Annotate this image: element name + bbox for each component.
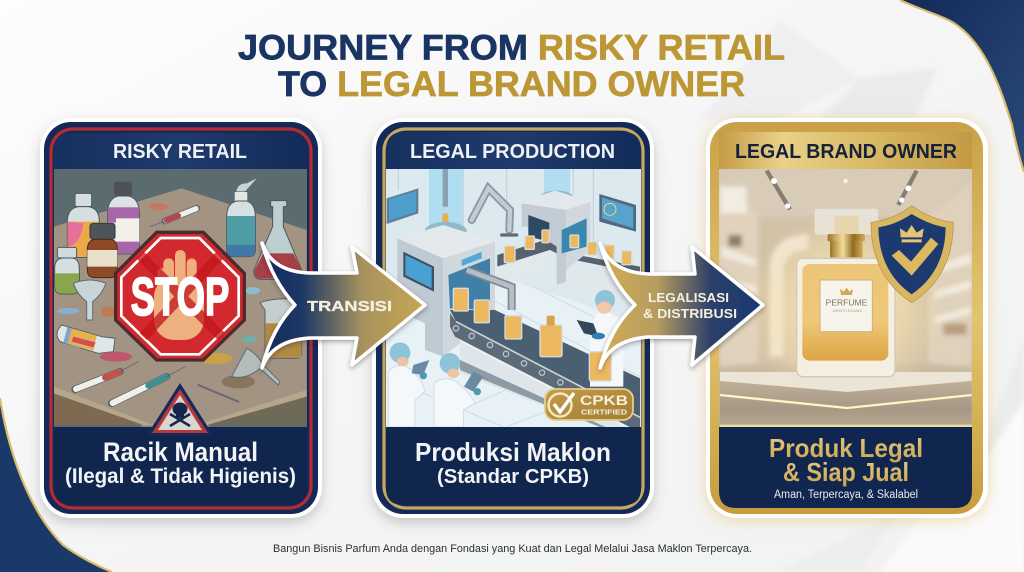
heading: risky retail <box>54 133 307 169</box>
title <box>238 28 785 104</box>
syringes <box>75 208 238 403</box>
caption: produksi maklon: (Standar CPKB) <box>437 466 589 488</box>
heading: risky retail: RISKY RETAIL <box>113 141 247 163</box>
screen: right <box>599 194 636 232</box>
icon: stop sign <box>114 231 246 362</box>
caption: produk legal: & Siap Jual <box>783 457 909 487</box>
caption: produksi maklon: Produksi Maklon <box>415 437 611 467</box>
caption: produksi maklon <box>386 427 641 505</box>
title: TO LEGAL BRAND OWNER <box>278 65 745 104</box>
arrow: transisi: TRANSISI <box>307 299 392 315</box>
bottle: purple <box>108 182 139 254</box>
caption: produk legal: Aman, Terpercaya, & Skalabel <box>774 489 918 501</box>
icon: stop sign: STOP <box>131 268 229 327</box>
machine: right <box>522 167 591 285</box>
robot arm <box>472 188 517 235</box>
panel: risky retail <box>40 118 322 518</box>
arm pipe <box>467 270 512 310</box>
panel: legal brand owner <box>706 118 988 518</box>
beaker <box>260 299 302 358</box>
caption: racik manual: (Ilegal & Tidak Higienis) <box>65 465 296 488</box>
conveyor <box>450 310 640 427</box>
flask <box>254 201 302 279</box>
bottle: orange <box>67 193 99 257</box>
illustration: boutique <box>719 169 972 427</box>
heading: legal brand owner: LEGAL BRAND OWNER <box>735 141 958 163</box>
heading: legal brand owner <box>719 132 972 169</box>
arrow: legalisasi dan distribusi <box>600 243 763 368</box>
footer tagline: Bangun Bisnis Parfum Anda dengan Fondasi yang Kuat dan Legal Melalui Jasa Maklon Terpercaya. <box>273 543 752 555</box>
funnel <box>73 280 106 320</box>
screen: left <box>387 188 418 224</box>
workers: front <box>388 342 483 427</box>
badge: cpkb certified <box>545 389 633 420</box>
decoration: bottom left navy corner <box>0 398 112 572</box>
caption: racik manual: Racik Manual <box>103 437 258 467</box>
decoration: top right navy corner <box>900 0 1024 172</box>
caption: racik manual <box>54 427 307 505</box>
bottle: teal <box>227 178 257 257</box>
back conveyor <box>497 241 640 286</box>
bottle: brown jar <box>87 223 117 278</box>
badge: cpkb certified: CERTIFIED <box>581 408 628 416</box>
perfume bottle: GENTLEMAN <box>832 309 862 313</box>
icon: skull warning <box>147 383 213 435</box>
worker: standing <box>577 290 623 387</box>
caption: produk legal <box>719 427 972 508</box>
podium <box>720 213 972 427</box>
bottle: green <box>55 247 79 294</box>
bottles on conveyor <box>453 230 632 357</box>
funnel: fallen <box>232 348 280 385</box>
spills <box>57 203 260 388</box>
title: JOURNEY FROM RISKY RETAIL <box>238 28 785 68</box>
bottle: fallen <box>57 325 115 353</box>
badge: cpkb certified: CPKB <box>580 392 628 408</box>
caption: produk legal: Produk Legal <box>769 433 923 463</box>
perfume bottle: PERFUME <box>826 298 867 307</box>
heading: legal production: LEGAL PRODUCTION <box>410 141 615 163</box>
arrow: legalisasi dan distribusi: & DISTRIBUSI <box>643 307 737 321</box>
icon: shield <box>871 206 953 303</box>
illustration: messy table <box>50 167 313 433</box>
arrow: transisi <box>262 243 425 368</box>
panel: legal production <box>372 118 654 518</box>
arrow: legalisasi dan distribusi: LEGALISASI <box>648 291 729 305</box>
bottle: front <box>589 352 611 381</box>
machine: left <box>397 167 495 357</box>
illustration: factory <box>383 167 643 443</box>
perfume bottle <box>797 208 895 377</box>
heading: legal production <box>386 132 641 169</box>
